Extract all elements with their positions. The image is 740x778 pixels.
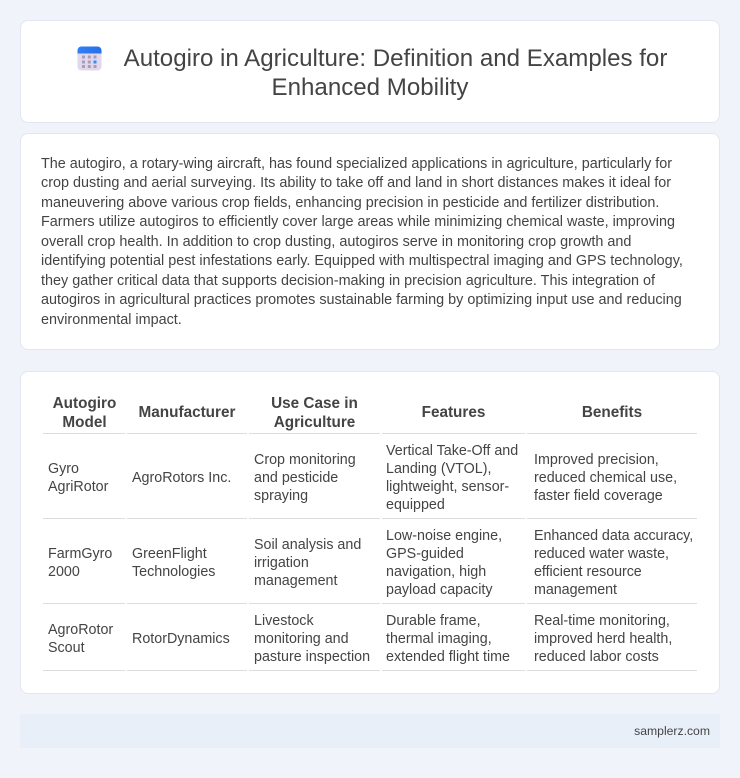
text block: introduction: Farmers utilize autogiros to efficiently cover large areas while minimizing chemical waste, improving bbox=[41, 214, 675, 230]
table row: FarmGyro 2000: management bbox=[254, 573, 337, 589]
table row: AgroRotor Scout: RotorDynamics bbox=[132, 631, 230, 647]
table header row: Use Case in bbox=[271, 395, 358, 412]
icon: calendar bbox=[78, 46, 102, 70]
table row: Gyro AgriRotor: Improved precision, bbox=[534, 452, 659, 468]
table row: AgroRotor Scout: extended flight time bbox=[386, 649, 510, 665]
table row: FarmGyro 2000: FarmGyro bbox=[48, 546, 112, 562]
table row: Gyro AgriRotor: Gyro bbox=[48, 461, 79, 477]
table row: FarmGyro 2000: Enhanced data accuracy, bbox=[534, 528, 693, 544]
table row: Gyro AgriRotor: faster field coverage bbox=[534, 488, 663, 504]
table row: Gyro AgriRotor bbox=[43, 443, 697, 519]
table row: AgroRotor Scout bbox=[43, 613, 697, 671]
text block: introduction: crop dusting and aerial surveying. Its ability to take off and land in short distances makes it ideal for bbox=[41, 175, 671, 191]
table row: FarmGyro 2000: 2000 bbox=[48, 564, 80, 580]
table header row: Benefits bbox=[582, 404, 642, 421]
table row: FarmGyro 2000: GPS-guided bbox=[386, 546, 464, 562]
panel: introduction text bbox=[20, 133, 720, 350]
table row: Gyro AgriRotor: Landing (VTOL), bbox=[386, 461, 491, 477]
table row: Gyro AgriRotor: Crop monitoring bbox=[254, 452, 356, 468]
table row: FarmGyro 2000: Technologies bbox=[132, 564, 215, 580]
table row: FarmGyro 2000: Soil analysis and bbox=[254, 537, 361, 553]
table row: Gyro AgriRotor: lightweight, sensor- bbox=[386, 479, 509, 495]
table row: Gyro AgriRotor: equipped bbox=[386, 497, 445, 513]
panel: title card bbox=[20, 20, 720, 123]
table header row: Manufacturer bbox=[139, 404, 235, 421]
table row: FarmGyro 2000: Low-noise engine, bbox=[386, 528, 502, 544]
table row: AgroRotor Scout: thermal imaging, bbox=[386, 631, 492, 647]
table row: Gyro AgriRotor: spraying bbox=[254, 488, 308, 504]
table row: AgroRotor Scout: improved herd health, bbox=[534, 631, 672, 647]
table header row: Features bbox=[422, 404, 485, 421]
table row: FarmGyro 2000: GreenFlight bbox=[132, 546, 207, 562]
table row: Gyro AgriRotor: reduced chemical use, bbox=[534, 470, 677, 486]
table row: FarmGyro 2000: management bbox=[534, 582, 617, 598]
text block: introduction: maneuvering above various crop fields, enhancing precision in pesticide and fertilizer distribution. bbox=[41, 195, 659, 211]
text block: introduction: autogiros in agricultural practices promotes sustainable farming by optimizing input use and reducing bbox=[41, 292, 682, 308]
footer source text: samplerz.com bbox=[634, 724, 710, 738]
table row: FarmGyro 2000: efficient resource bbox=[534, 564, 642, 580]
text block: introduction: environmental impact. bbox=[41, 312, 182, 328]
heading: title: Enhanced Mobility bbox=[272, 74, 468, 101]
table row: FarmGyro 2000 bbox=[43, 528, 697, 604]
panel: table card bbox=[20, 371, 720, 694]
text block: introduction: identifying potential pest infestations early. Equipped with multispectral imaging and GPS technology, bbox=[41, 253, 683, 269]
text block: introduction: overall crop health. In addition to crop dusting, autogiros serve in monitoring crop growth and bbox=[41, 234, 631, 250]
heading: title: Autogiro in Agriculture: Definition and Examples for bbox=[124, 45, 667, 72]
table row: AgroRotor Scout: Scout bbox=[48, 640, 85, 656]
table row: AgroRotor Scout: pasture inspection bbox=[254, 649, 370, 665]
heading: title bbox=[124, 45, 667, 101]
table row: FarmGyro 2000: irrigation bbox=[254, 555, 309, 571]
table row: AgroRotor Scout: reduced labor costs bbox=[534, 649, 659, 665]
table row: AgroRotor Scout: monitoring and bbox=[254, 631, 349, 647]
table row: Gyro AgriRotor: Vertical Take-Off and bbox=[386, 443, 518, 459]
table row: Gyro AgriRotor: AgroRotors Inc. bbox=[132, 470, 231, 486]
table row: FarmGyro 2000: navigation, high bbox=[386, 564, 486, 580]
table row: FarmGyro 2000: reduced water waste, bbox=[534, 546, 669, 562]
text block: introduction bbox=[41, 156, 683, 328]
table header row: Model bbox=[62, 414, 107, 431]
text block: introduction: they gather critical data that supports decision-making in precision agriculture. This integration of bbox=[41, 273, 655, 289]
table row: Gyro AgriRotor: and pesticide bbox=[254, 470, 338, 486]
table header row: Agriculture bbox=[274, 414, 355, 431]
table header row: Autogiro bbox=[53, 395, 116, 412]
text block: introduction: The autogiro, a rotary-wing aircraft, has found specialized applications in agriculture, particularly for bbox=[41, 156, 672, 172]
table row: FarmGyro 2000: payload capacity bbox=[386, 582, 493, 598]
table header row bbox=[43, 395, 697, 434]
footer bar bbox=[20, 714, 720, 748]
table row: AgroRotor Scout: Real-time monitoring, bbox=[534, 613, 670, 629]
table row: AgroRotor Scout: AgroRotor bbox=[48, 622, 113, 638]
table row: AgroRotor Scout: Livestock bbox=[254, 613, 314, 629]
table row: AgroRotor Scout: Durable frame, bbox=[386, 613, 481, 629]
table: autogiro models bbox=[43, 395, 697, 671]
table row: Gyro AgriRotor: AgriRotor bbox=[48, 479, 108, 495]
